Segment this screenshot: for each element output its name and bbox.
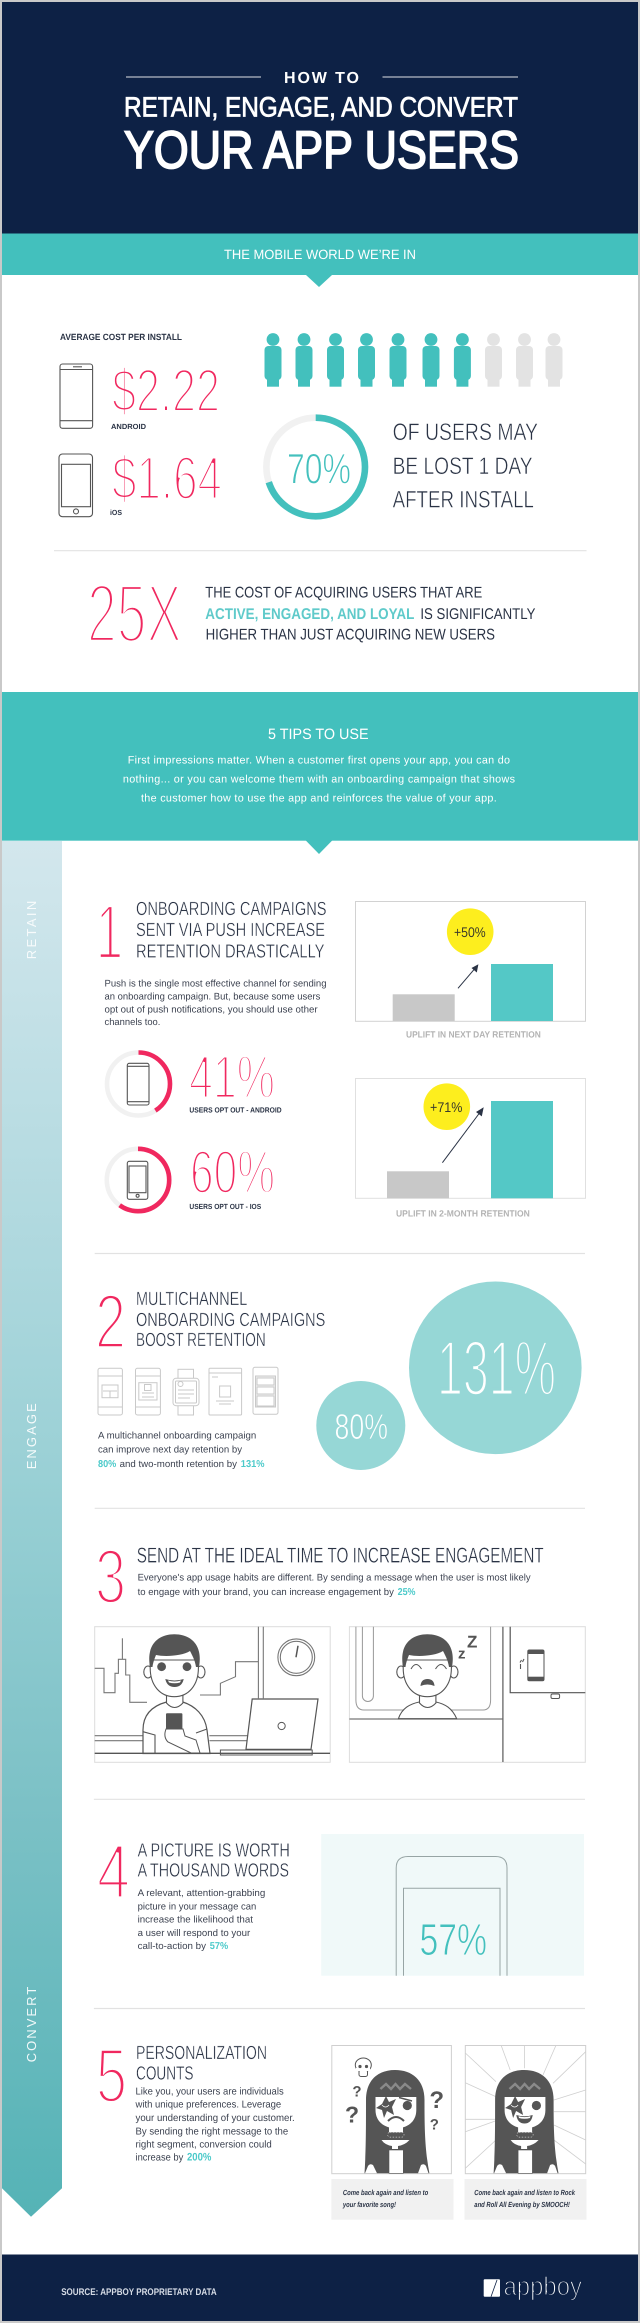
text block: tip 2 body: can improve next day retention by [98, 1445, 242, 1456]
heading: tip 4 [138, 1841, 290, 1882]
panel: average cost per install [59, 332, 222, 517]
bar chart: two month retention [356, 1078, 586, 1198]
text block: tip 4 body [138, 1888, 265, 1952]
text block: tip 4 body: call-to-action by [138, 1941, 206, 1952]
text block: tip 3 body: to engage with your brand, you can increase engagement by [138, 1587, 394, 1598]
logo: appboy: appboy [504, 2271, 582, 2301]
text block: cost of acquiring users: HIGHER THAN JUST ACQUIRING NEW USERS [206, 626, 495, 643]
illustration: happy girl [465, 2046, 586, 2174]
section banner: the mobile world [2, 234, 638, 287]
icons: question marks: ? [345, 2102, 359, 2128]
bubble: 131 percent [409, 1282, 582, 1454]
caption: two month retention: UPLIFT IN 2-MONTH RETENTION [396, 1209, 530, 1219]
text block: tip 4 body: 57% [210, 1941, 228, 1952]
icon: android phone [127, 1063, 149, 1105]
text block: tip 5 body [135, 2086, 295, 2164]
phone panel: 57 percent: 57% [420, 1914, 487, 1965]
heading: tip 2 [136, 1289, 325, 1351]
donut chart: 60 percent ios [107, 1149, 169, 1211]
sidebar ribbon: retain, engage, convert: ENGAGE [24, 1403, 39, 1469]
heading: tip 1: ONBOARDING CAMPAIGNS [136, 899, 326, 920]
icon: ios phone [127, 1161, 148, 1199]
icon: android phone [60, 364, 93, 428]
text block: tip 3 body: 25% [398, 1587, 416, 1598]
stat: android cost: $2.22 [112, 356, 220, 424]
heading: tip 2: ONBOARDING CAMPAIGNS [136, 1310, 325, 1331]
header banner [2, 2, 638, 234]
heading: tip 2: MULTICHANNEL [136, 1289, 247, 1310]
donut chart: 41 percent android [107, 1052, 170, 1116]
footer [2, 2254, 638, 2321]
icons: question marks: ? [430, 2116, 439, 2133]
text block: users lost: BE LOST 1 DAY [393, 453, 533, 480]
stat: 41 percent: 41% [189, 1043, 275, 1111]
heading: tip 2: BOOST RETENTION [136, 1330, 266, 1351]
icons: question marks [345, 2084, 444, 2133]
illustration: confused girl [332, 2046, 451, 2174]
label: android: ANDROID [111, 422, 147, 431]
stat: 25x: 25X [87, 567, 182, 660]
text block: tip 4 body: increase the likelihood that [138, 1915, 253, 1926]
sleeping man figure [397, 1634, 458, 1719]
heading: tip 4: A THOUSAND WORDS [138, 1861, 289, 1882]
text block: tip 1 body: an onboarding campaign. But, because some users [104, 991, 321, 1002]
number 3: 3 [95, 1534, 126, 1620]
illustration: sleeping man [349, 1627, 585, 1762]
text block: tip 2 body [98, 1430, 265, 1470]
title: your app users: YOUR APP USERS [124, 121, 519, 180]
stat: 60 percent: 60% [190, 1138, 275, 1206]
caption: personalized message: and Roll All Evening by SMOOCH! [474, 2200, 570, 2209]
girl figure [364, 2070, 429, 2173]
heading: tip 1 [136, 899, 326, 962]
panel: tip 1 [96, 890, 586, 1219]
text block: tip 4 body: picture in your message can [138, 1901, 256, 1912]
icon: skull [355, 2058, 371, 2076]
source note: SOURCE: APPBOY PROPRIETARY DATA [61, 2287, 217, 2298]
text block: tip 5 body: Like you, your users are individuals [136, 2086, 284, 2097]
label: ios opt out: USERS OPT OUT - IOS [189, 1202, 261, 1211]
heading: tip 4: A PICTURE IS WORTH [138, 1841, 290, 1862]
icon: buzzing phone [520, 1650, 544, 1681]
heading: tip 1: SENT VIA PUSH INCREASE [136, 920, 325, 941]
text block: users lost: OF USERS MAY [393, 419, 538, 446]
text block: tip 5 body: 200% [187, 2152, 212, 2164]
number 4: 4 [97, 1829, 130, 1915]
caption: generic message: your favorite song! [342, 2200, 396, 2209]
bubble: 80 percent [316, 1381, 405, 1470]
bar chart: two month retention: +71% [430, 1099, 462, 1115]
text block: tip 4 body: a user will respond to your [138, 1928, 251, 1939]
title: how to: HOW TO [284, 70, 359, 87]
title: retain, engage, and convert: RETAIN, ENGAGE, AND CONVERT [124, 92, 518, 123]
text block: cost of acquiring users: ACTIVE, ENGAGED, AND LOYAL [205, 606, 414, 623]
text block: tip 2 body: 80% [98, 1459, 116, 1470]
donut chart: 70 percent: 70% [287, 446, 351, 494]
icons: question marks: ? [429, 2087, 444, 2114]
icon: ios phone [59, 454, 92, 517]
text block: cost of acquiring users: IS SIGNIFICANTLY [420, 606, 535, 623]
panel: tip 2 [95, 1279, 582, 1470]
heading: tip 5: COUNTS [136, 2063, 194, 2084]
panel: tip 3 [95, 1534, 585, 1762]
caption: generic message: Come back again and listen to [343, 2188, 429, 2197]
caption: personalized message [464, 2179, 586, 2220]
heading: average cost: AVERAGE COST PER INSTALL [60, 332, 182, 342]
sleep letters: z [458, 1645, 466, 1662]
text block: tip 5 body: increase by [136, 2153, 183, 2164]
text block: tip 4 body: A relevant, attention-grabbing [138, 1888, 265, 1899]
text block: tip 1 body [104, 979, 326, 1028]
text block: tip 3 body [138, 1573, 531, 1598]
text block: tip 1 body: channels too. [104, 1017, 160, 1028]
bubble: 80 percent: 80% [334, 1406, 388, 1447]
section banner: the mobile world: THE MOBILE WORLD WE’RE IN [224, 247, 416, 262]
text block: users lost: AFTER INSTALL [393, 487, 534, 514]
text block: tip 2 body: A multichannel onboarding campaign [98, 1430, 256, 1441]
man figure [143, 1634, 210, 1754]
heading: tip 5 [136, 2043, 267, 2084]
text block: tip 5 body: right segment, conversion could [136, 2140, 272, 2151]
icons: five device channels [98, 1367, 278, 1415]
number 1: 1 [96, 890, 123, 976]
text block: cost of acquiring users: THE COST OF ACQUIRING USERS THAT ARE [205, 584, 482, 601]
heading: tip 5: PERSONALIZATION [136, 2043, 267, 2064]
laptop [220, 1699, 318, 1755]
icons: question marks: ? [352, 2084, 362, 2101]
text block: tip 2 body: 131% [241, 1459, 265, 1470]
text block: tip 3 body: Everyone's app usage habits are different. By sending a message when the user is most likely [138, 1573, 531, 1584]
sidebar ribbon: retain, engage, convert: CONVERT [24, 1987, 39, 2062]
heading: tip 1: RETENTION DRASTICALLY [136, 941, 325, 962]
bar chart: next day retention [356, 902, 586, 1021]
label: ios: iOS [110, 508, 122, 517]
sleep letters: Z [467, 1633, 477, 1652]
phone panel: 57 percent [321, 1834, 584, 1976]
section banner: 5 tips to use: the customer how to use the app and reinforces the value of your app. [141, 793, 497, 805]
text block: tip 5 body: your understanding of your customer. [136, 2113, 295, 2124]
label: android opt out: USERS OPT OUT - ANDROID [189, 1106, 282, 1115]
text block: tip 2 body: and two-month retention by [120, 1459, 237, 1470]
section banner: 5 tips to use: First impressions matter. When a customer first opens your app, you can do [128, 754, 510, 766]
caption: next day retention: UPLIFT IN NEXT DAY RETENTION [406, 1030, 541, 1040]
donut chart: 70 percent [266, 418, 365, 516]
bubble: 131 percent: 131% [437, 1324, 556, 1412]
panel: tip 4 [97, 1829, 584, 1976]
section banner: 5 tips to use: nothing... or you can welcome them with an onboarding campaign that shows [123, 773, 516, 785]
text block: tip 1 body: opt out of push notifications, you should use other [104, 1004, 318, 1015]
caption: personalized message: Come back again and listen to Rock [474, 2188, 576, 2197]
text block: users lost [393, 419, 538, 514]
number 2: 2 [95, 1279, 126, 1365]
illustration: awake man using phone [95, 1627, 330, 1762]
pictogram: ten users [264, 333, 562, 387]
bar chart: next day retention: +50% [454, 924, 486, 940]
panel: tip 5 [96, 2033, 586, 2220]
caption: generic message [331, 2179, 454, 2220]
section banner: 5 tips to use [2, 692, 638, 854]
sidebar ribbon: retain, engage, convert [2, 841, 62, 2217]
section banner: 5 tips to use: 5 TIPS TO USE [268, 726, 369, 743]
girl figure smiling [494, 2070, 558, 2173]
text block: tip 5 body: with unique preferences. Leverage [135, 2100, 282, 2111]
number 5: 5 [96, 2033, 127, 2119]
stat: ios cost: $1.64 [112, 444, 222, 512]
text block: cost of acquiring users [205, 584, 535, 643]
sleep letters [458, 1633, 477, 1662]
text block: tip 5 body: By sending the right message to the [136, 2126, 289, 2137]
text block: tip 1 body: Push is the single most effective channel for sending [104, 979, 326, 990]
sidebar ribbon: retain, engage, convert: RETAIN [24, 901, 39, 959]
